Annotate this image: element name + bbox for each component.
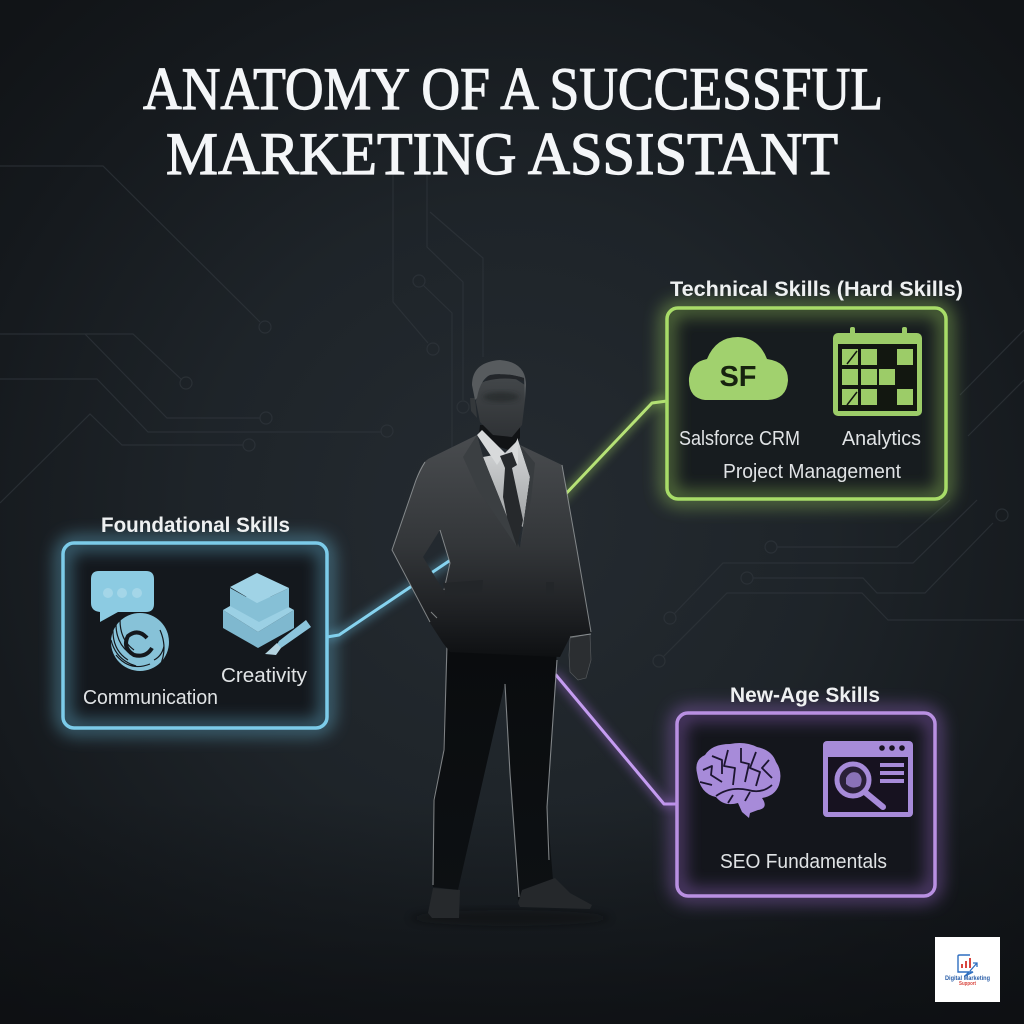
shirt xyxy=(483,440,530,527)
panel frame xyxy=(677,713,935,896)
icon: browser with magnifier xyxy=(823,741,913,817)
label: seo fundamentals: SEO Fundamentals xyxy=(720,851,887,873)
floor shadow xyxy=(410,910,610,926)
ear xyxy=(470,398,477,418)
connector: foundational skills to figure xyxy=(327,557,455,637)
panel: foundational skills xyxy=(63,514,327,728)
connector: technical skills to figure xyxy=(560,401,667,500)
jacket rim light xyxy=(392,462,591,637)
face xyxy=(476,372,525,437)
label: project management: Project Management xyxy=(723,461,901,483)
figure: man in suit xyxy=(392,360,610,926)
panel: new-age skills xyxy=(677,684,935,896)
icon: speech bubble xyxy=(91,571,154,622)
icon: brain xyxy=(696,743,780,818)
title: MARKETING ASSISTANT xyxy=(166,121,838,187)
heading: Technical Skills (Hard Skills) xyxy=(670,278,963,301)
icon: salesforce cloud xyxy=(689,337,788,400)
tie xyxy=(500,452,523,547)
heading: Foundational Skills xyxy=(101,514,290,537)
heading: New-Age Skills xyxy=(730,684,880,707)
logo: digital marketing support xyxy=(935,937,1000,1002)
label: analytics: Analytics xyxy=(842,428,921,450)
logo: digital marketing support: Digital Marketing xyxy=(945,975,990,982)
title: ANATOMY OF A SUCCESSFUL xyxy=(143,56,883,122)
shoes xyxy=(428,888,460,918)
trouser rim light xyxy=(433,645,557,897)
label: communication: Communication xyxy=(83,687,218,709)
pocket flaps xyxy=(443,580,554,596)
icon: calendar xyxy=(833,327,922,416)
lapels xyxy=(463,435,517,547)
icon: swirl xyxy=(111,613,169,671)
logo: digital marketing support: Support xyxy=(959,981,976,987)
trousers xyxy=(433,640,557,900)
panel frame xyxy=(667,308,946,499)
panel: technical skills xyxy=(667,278,963,499)
collar xyxy=(477,430,518,465)
right hand xyxy=(569,634,591,680)
circuit board background pattern xyxy=(0,166,1024,667)
label: creativity: Creativity xyxy=(221,665,307,687)
neck xyxy=(479,425,520,451)
icon: salesforce cloud: SF xyxy=(719,361,757,393)
jacket xyxy=(392,435,591,657)
hair xyxy=(472,360,526,400)
eye shadow xyxy=(483,392,519,402)
label: salesforce crm: Salsforce CRM xyxy=(679,428,800,450)
title xyxy=(143,56,883,187)
icon: boxes and brush xyxy=(223,573,311,655)
connector: new-age skills to figure xyxy=(556,675,677,804)
hairline shadow xyxy=(486,374,524,381)
panel frame xyxy=(63,543,327,728)
